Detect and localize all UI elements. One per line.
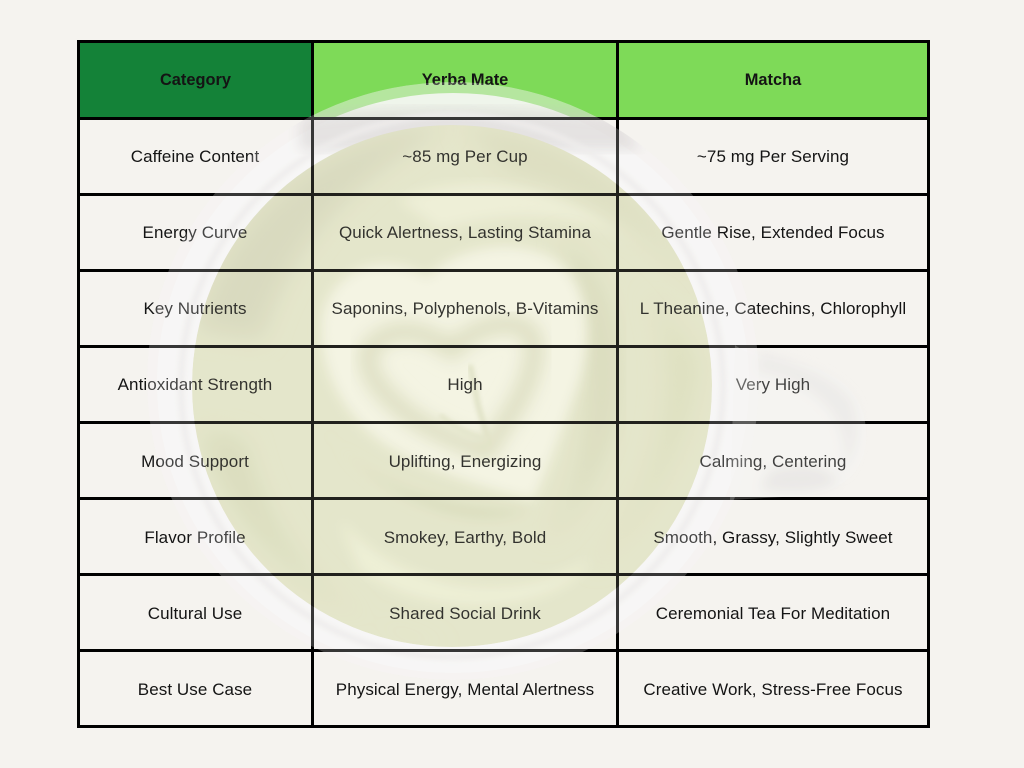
row: best use case: Physical Energy, Mental Alertness: [336, 680, 594, 699]
row: best use case: [138, 680, 903, 699]
row: mood support: Uplifting, Energizing: [389, 452, 541, 471]
row: energy curve: Quick Alertness, Lasting Stamina: [339, 223, 591, 242]
row: key nutrients: Key Nutrients: [143, 299, 247, 318]
row: caffeine content: ~75 mg Per Serving: [697, 147, 849, 166]
row: caffeine content: ~85 mg Per Cup: [402, 147, 528, 166]
icon: matcha surface with heart latte art: [192, 125, 712, 647]
latte heart: [322, 247, 586, 500]
header fill: yerba mate and matcha: [313, 42, 929, 118]
header: matcha: Matcha: [745, 70, 801, 88]
row: cultural use: [148, 604, 890, 623]
row: antioxidant strength: [118, 375, 810, 394]
row: flavor profile: Smooth, Grassy, Slightly Sweet: [653, 528, 893, 547]
icon: cup rim: [298, 82, 634, 150]
row: cultural use: Ceremonial Tea For Meditation: [656, 604, 890, 623]
header fill: category: [79, 42, 312, 118]
icon: cup handle: [730, 340, 866, 500]
row: cultural use: Shared Social Drink: [389, 604, 541, 623]
row: key nutrients: [143, 299, 906, 318]
row: key nutrients: Saponins, Polyphenols, B-Vitamins: [332, 299, 598, 318]
row: mood support: Mood Support: [141, 452, 249, 471]
row: antioxidant strength: High: [447, 375, 483, 394]
row: energy curve: Gentle Rise, Extended Focus: [661, 223, 885, 242]
row: caffeine content: Caffeine Content: [131, 147, 259, 166]
row: flavor profile: Smokey, Earthy, Bold: [384, 528, 546, 547]
row: cultural use: Cultural Use: [148, 604, 242, 623]
row: best use case: Best Use Case: [138, 680, 252, 699]
row: antioxidant strength: Very High: [736, 375, 810, 394]
row: flavor profile: [144, 528, 893, 547]
matcha latte cup photo: [192, 82, 826, 647]
row: flavor profile: Flavor Profile: [144, 528, 246, 547]
row: energy curve: [143, 223, 885, 242]
row: best use case: Creative Work, Stress-Free Focus: [643, 680, 903, 699]
header: yerba mate: Yerba Mate: [422, 70, 508, 88]
row: caffeine content: [131, 147, 849, 166]
row: mood support: [141, 452, 846, 471]
header: category: Category: [160, 70, 231, 88]
row: key nutrients: L Theanine, Catechins, Chlorophyll: [640, 299, 906, 318]
row: antioxidant strength: Antioxidant Strength: [118, 375, 272, 394]
row: energy curve: Energy Curve: [143, 223, 247, 242]
row: mood support: Calming, Centering: [700, 452, 846, 471]
